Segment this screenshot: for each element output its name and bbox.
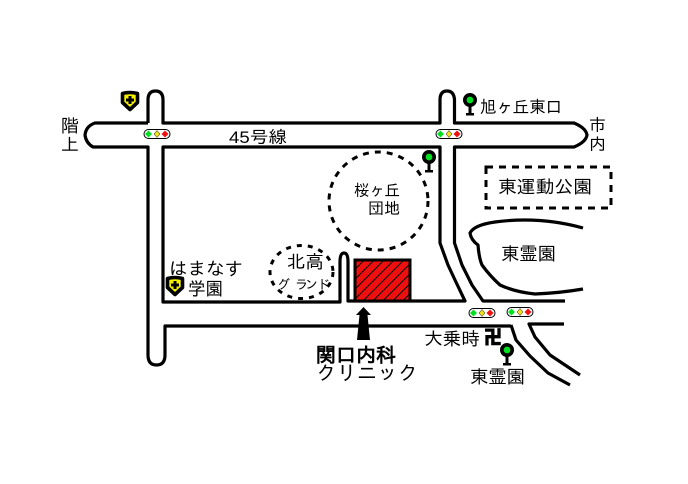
area: 桜ヶ丘団地: 団地 <box>368 201 400 218</box>
area: 東運動公園 <box>486 167 611 208</box>
area: 北高グランド: グランド <box>277 277 330 292</box>
label: 東霊園 station: 東霊園 <box>470 367 525 387</box>
area: 桜ヶ丘団地 <box>329 152 428 250</box>
label: 市内: 市 <box>589 116 606 135</box>
label: 市内: 内 <box>589 135 606 154</box>
label: 東霊園 in park: 東霊園 <box>501 244 556 264</box>
area: 東運動公園: 東運動公園 <box>498 177 592 197</box>
icon: traffic signal south <box>469 308 495 318</box>
label: 大乗時: 大乗時 <box>424 329 480 349</box>
icon: tree 桜ヶ丘 <box>424 152 434 172</box>
label: はまなす学園: 学園 <box>188 279 223 299</box>
area: 北高グランド: 北高 <box>287 252 324 272</box>
clinic name <box>316 344 418 385</box>
icon: tree 東霊園 <box>502 345 512 366</box>
pond: 東霊園 <box>470 220 583 294</box>
label: 旭ヶ丘東口: 旭ヶ丘東口 <box>480 98 562 117</box>
label: 階上: 階 <box>61 116 79 136</box>
clinic building <box>355 260 410 301</box>
icon: traffic signal west <box>144 130 170 138</box>
label: はまなす学園 <box>169 259 243 299</box>
area: 桜ヶ丘団地: 桜ヶ丘 <box>354 183 400 200</box>
icon: tree 旭ヶ丘東口 <box>465 95 475 116</box>
icon: temple: 卍 <box>484 328 502 349</box>
roads <box>85 91 587 385</box>
label: 階上: 上 <box>61 135 79 155</box>
icon: traffic signal east <box>436 130 462 138</box>
label: はまなす学園: はまなす <box>169 259 243 279</box>
road label: 45号線: 45号線 <box>229 128 287 147</box>
clinic name: 関口内科 <box>316 344 396 367</box>
icon: shield はまなす学園 <box>168 278 182 294</box>
icon: shield north <box>122 92 138 110</box>
area: 北高グランド <box>270 246 333 298</box>
label: 階上 <box>61 116 79 155</box>
arrow to clinic <box>356 307 371 340</box>
icon: traffic signal southeast <box>507 308 533 316</box>
label: 市内 <box>589 116 606 154</box>
clinic name: クリニック <box>316 363 418 385</box>
